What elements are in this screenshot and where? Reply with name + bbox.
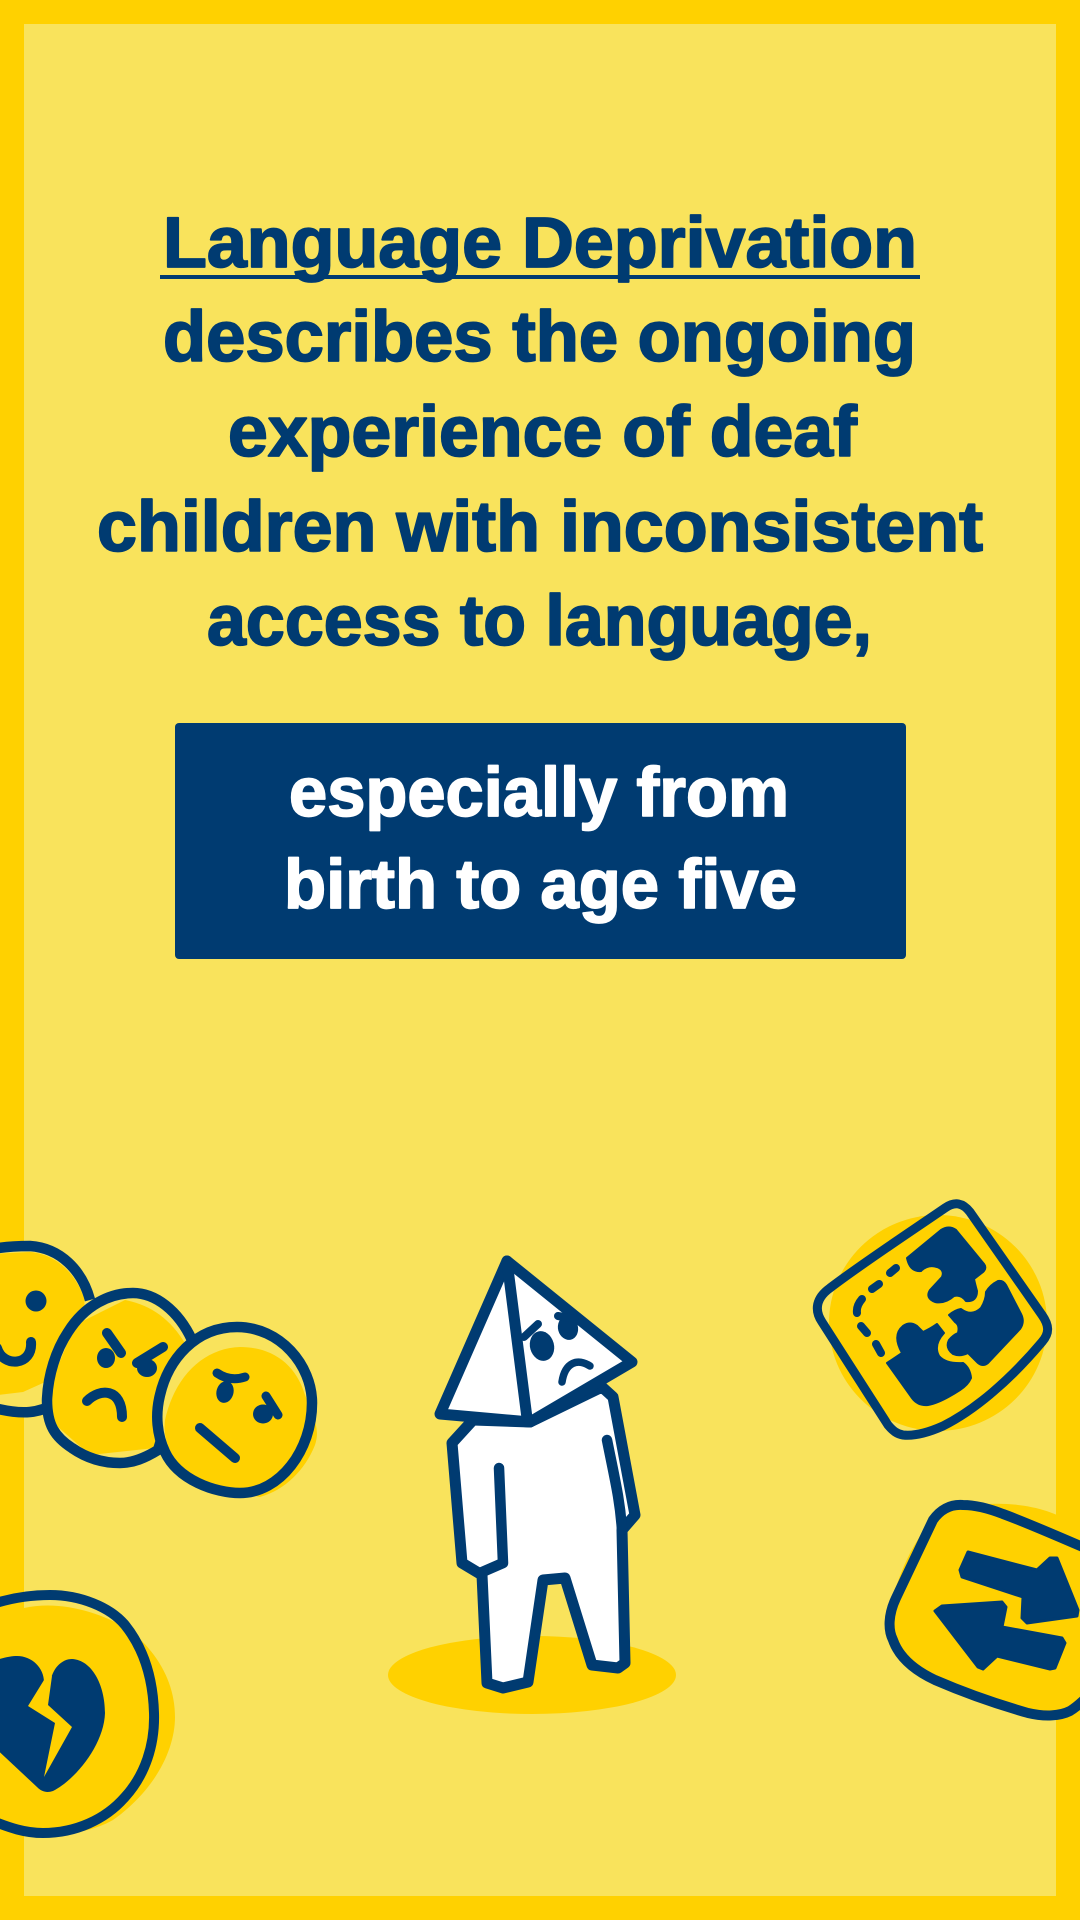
icon: three emotion faces xyxy=(0,1246,317,1497)
icon: ground shadow xyxy=(388,1636,676,1714)
icon: opposing arrows badge xyxy=(890,1504,1080,1716)
icon: neutral face xyxy=(157,1327,317,1497)
icon: puzzle pieces badge xyxy=(817,1204,1048,1435)
sad face on head xyxy=(524,1314,590,1382)
icon: smiling face xyxy=(0,1246,90,1412)
missing piece dashed outline xyxy=(857,1268,896,1353)
triangular head xyxy=(440,1261,632,1422)
heading line: Language Deprivation (underlined): Language Deprivation xyxy=(163,204,917,283)
arrow left xyxy=(935,1602,1065,1669)
figure body xyxy=(452,1387,635,1688)
heading: language deprivation definition xyxy=(97,204,983,661)
heading: language deprivation definition: experience of deaf xyxy=(228,393,857,472)
icon: angry face xyxy=(47,1293,192,1463)
heading: language deprivation definition: describes the ongoing xyxy=(163,298,916,377)
puzzle piece shapes xyxy=(887,1228,1023,1405)
icon: sad figure with triangular head xyxy=(440,1261,635,1688)
arrow right xyxy=(960,1552,1078,1623)
callout: especially from birth to age five xyxy=(175,723,906,959)
arm lines xyxy=(480,1440,622,1573)
heading: language deprivation definition: children with inconsistent xyxy=(97,488,983,567)
callout: especially from birth to age five: especially from xyxy=(289,753,789,831)
heading: language deprivation definition: access to language, xyxy=(207,582,872,661)
icon: broken heart badge xyxy=(0,1595,175,1834)
callout: especially from birth to age five: birth to age five xyxy=(284,845,797,923)
